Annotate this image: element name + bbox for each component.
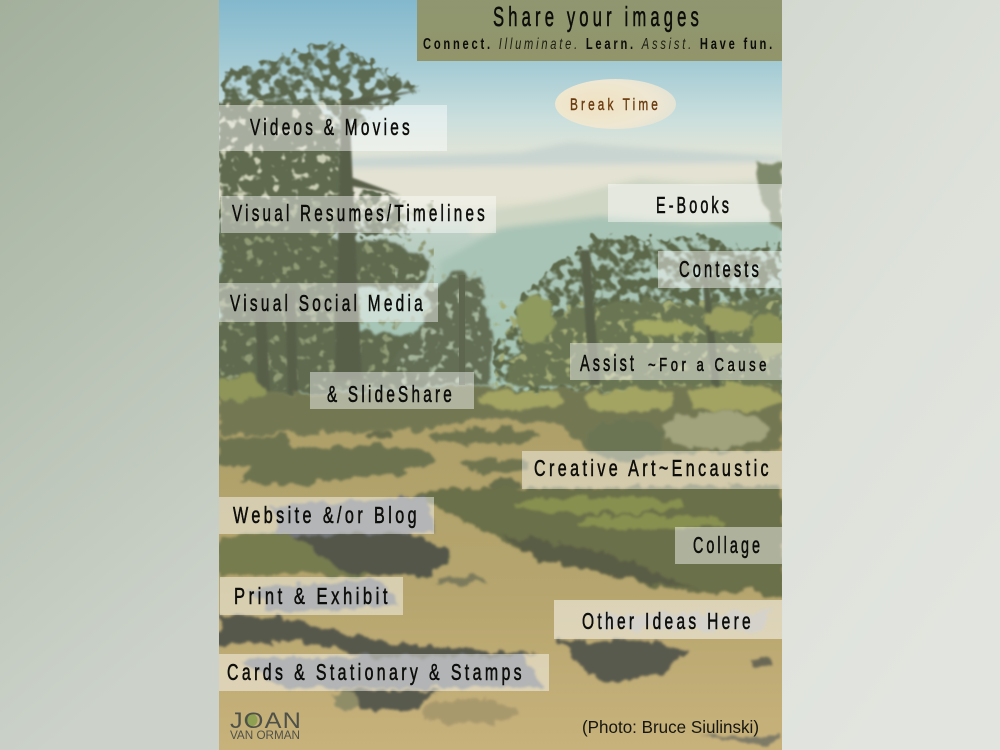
logo: joan van orman	[230, 708, 302, 742]
label: cards and stationary	[219, 654, 549, 691]
right pine top	[755, 160, 782, 230]
label: e-books	[608, 184, 782, 222]
label: creative art	[522, 451, 782, 489]
label: cards and stationary: Cards & Stationary & Stamps	[227, 659, 525, 685]
logo: joan van orman: JOAN	[230, 708, 302, 733]
ground	[219, 395, 782, 750]
tagline: Connect. Illuminate. Learn. Assist. Have fun.	[423, 36, 775, 53]
photo credit: (Photo: Bruce Siulinski)	[582, 717, 759, 737]
lower left moss	[219, 532, 450, 578]
label: e-books: E-Books	[656, 192, 732, 218]
label: website and blog: Website &/or Blog	[233, 502, 420, 528]
callout: break time	[555, 79, 676, 129]
title: Share your images	[493, 1, 703, 32]
sunlit foliage	[517, 296, 553, 344]
left tree light flecks	[219, 100, 349, 200]
header panel	[417, 0, 782, 61]
label: print and exhibit	[220, 577, 403, 615]
label: assist for a cause: ~For a Cause	[648, 354, 770, 375]
label: collage	[675, 527, 782, 564]
callout: break time: Break Time	[570, 95, 661, 114]
label: print and exhibit: Print & Exhibit	[234, 583, 391, 609]
label: website and blog	[219, 497, 434, 534]
label: other ideas	[554, 600, 782, 639]
distant hills	[352, 142, 782, 278]
label: assist for a cause: Assist	[580, 350, 637, 376]
label: collage: Collage	[693, 532, 763, 558]
label: visual social media	[219, 283, 438, 322]
landscape photo	[216, 0, 788, 750]
large moss field	[400, 485, 782, 598]
ground shadows	[219, 615, 540, 662]
label: slideshare	[310, 372, 474, 409]
left tree dark mass	[219, 100, 440, 400]
left pine crown	[219, 42, 420, 240]
mid pines	[395, 268, 492, 385]
scrub band	[219, 380, 782, 455]
logo: joan van orman: VAN ORMAN	[230, 730, 300, 742]
right tree flecks	[495, 300, 782, 395]
label: other ideas: Other Ideas Here	[582, 608, 754, 634]
darker patches beneath labels	[270, 497, 435, 534]
label: contests	[658, 251, 782, 288]
label: contests: Contests	[679, 256, 762, 282]
right tree canopy	[495, 235, 782, 395]
label: creative art: Creative Art~Encaustic	[534, 455, 772, 481]
trunks	[255, 90, 420, 395]
label: visual resumes	[221, 196, 496, 233]
label: visual social media: Visual Social Media	[230, 290, 426, 316]
moss mounds left	[219, 435, 436, 486]
label: videos and movies	[219, 105, 447, 151]
label: visual resumes: Visual Resumes/Timelines	[232, 200, 488, 226]
label: videos and movies: Videos & Movies	[250, 114, 413, 140]
label: slideshare: & SlideShare	[327, 381, 455, 407]
label: assist for a cause	[570, 343, 782, 380]
